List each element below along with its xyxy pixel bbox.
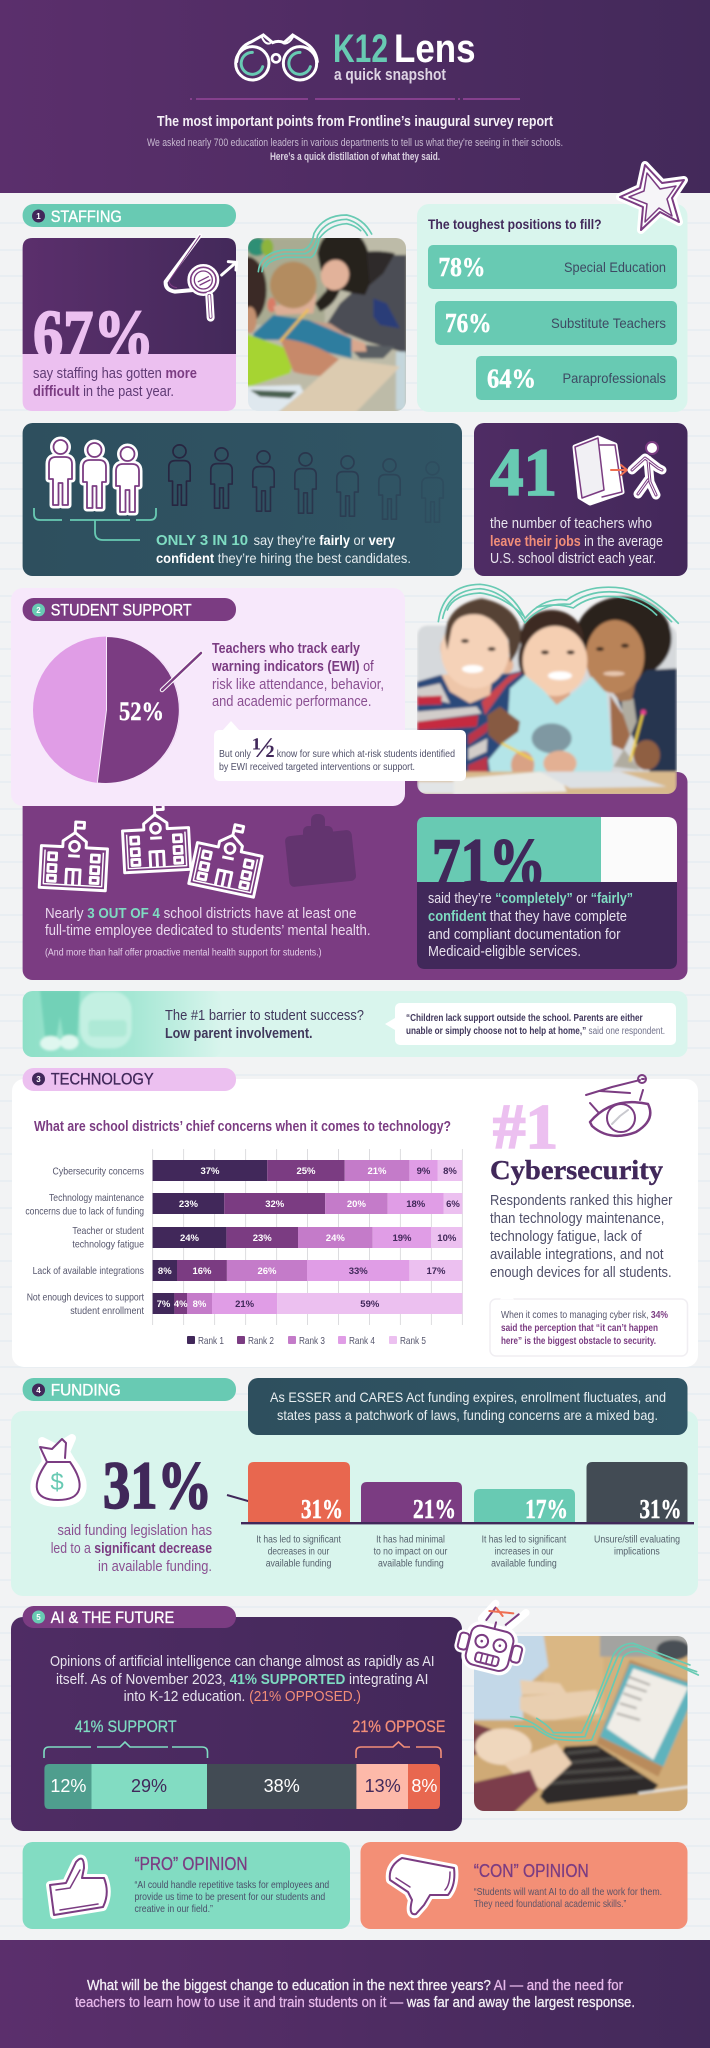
- row: not enough devices: 7%: [157, 1299, 171, 1310]
- closing statement: [75, 1977, 635, 2011]
- callout: half know for sure: [214, 721, 466, 781]
- stacked opinion bar: 12%: [50, 1776, 86, 1796]
- row: not enough devices: 4%: [174, 1299, 188, 1310]
- caption: ONLY 3 IN 10: [156, 532, 248, 549]
- quote: [134, 1879, 329, 1915]
- decorative teal trail over laptop: [511, 1643, 698, 1741]
- cybersecurity text: enough devices for all students.: [490, 1264, 672, 1281]
- row: technology fatigue: 19%: [392, 1233, 412, 1244]
- caption: said funding legislation has: [58, 1523, 212, 1539]
- caption: say they’re fairly or very: [254, 532, 395, 548]
- chart legend: Rank 4: [349, 1335, 375, 1347]
- pie caption: and academic performance.: [212, 694, 371, 710]
- quote: They need foundational academic skills.”: [474, 1898, 627, 1910]
- oppose label and bracket: 21% OPPOSE: [352, 1717, 445, 1736]
- section heading: staffing: [23, 204, 236, 227]
- panel: 67 percent staffing: [23, 236, 237, 411]
- row: not enough devices: 21%: [235, 1299, 255, 1310]
- caption: say staffing has gotten more: [33, 365, 197, 382]
- panel: only 3 in 10 confident: [23, 423, 462, 576]
- card: 71 percent: said they’re “completely” or “fairly”: [428, 891, 633, 907]
- bar captions: It has had minimal: [376, 1534, 445, 1546]
- card: 71 percent: [417, 817, 677, 969]
- row: cybersecurity: 8%: [443, 1166, 457, 1177]
- barrier text: [165, 1008, 364, 1042]
- funding intro box: As ESSER and CARES Act funding expires, enrollment fluctuates, and: [270, 1389, 666, 1405]
- barrier text: Low parent involvement.: [165, 1026, 312, 1042]
- icon: magnifying glass: [166, 236, 237, 318]
- quote callout: unable or simply choose not to help at home,” said one respondent.: [406, 1026, 665, 1037]
- caption: [45, 905, 370, 958]
- row labels: [25, 1166, 144, 1317]
- logo wordmark: K12: [333, 27, 388, 71]
- stacked bar chart: [25, 1149, 462, 1347]
- section heading: AI and the future: [23, 1606, 236, 1628]
- bar: unsure: [586, 1462, 688, 1524]
- icon: thumbs up: [50, 1859, 107, 1915]
- support label and bracket: [44, 1717, 208, 1758]
- heading: “CON” OPINION: [474, 1861, 589, 1881]
- section heading: student support: STUDENT SUPPORT: [51, 602, 192, 620]
- callout: cyber risk: [490, 1289, 688, 1356]
- callout: cyber risk: When it comes to managing cyber risk, 34%: [501, 1309, 669, 1321]
- icon: three highlighted people: [49, 440, 139, 512]
- bar: substitute teachers: Substitute Teachers: [551, 315, 666, 331]
- panel: funding: [11, 1378, 698, 1596]
- bar: paraprofessionals: Paraprofessionals: [562, 370, 666, 386]
- bar captions: [256, 1534, 680, 1570]
- row: technology maintenance: 18%: [406, 1199, 426, 1210]
- row: cybersecurity: [153, 1160, 462, 1181]
- pointer line: [162, 653, 201, 690]
- bar: substitute teachers: 76%: [445, 308, 491, 338]
- caption: [490, 516, 663, 567]
- bar: unsure: 31%: [640, 1494, 682, 1524]
- bar: substitute teachers: [435, 301, 677, 345]
- cybersecurity text: technology fatigue, lack of: [490, 1228, 642, 1245]
- row labels: technology fatigue: [72, 1238, 144, 1250]
- decorative teal trail: [258, 215, 372, 272]
- panel: student support: [11, 588, 405, 806]
- row labels: Cybersecurity concerns: [52, 1166, 144, 1178]
- row: technology fatigue: 24%: [326, 1233, 345, 1244]
- icon: seven muted people: [169, 445, 443, 522]
- cybersecurity text: available integrations, and not: [490, 1246, 664, 1263]
- pointer line: [227, 1495, 255, 1503]
- AI intro text: [50, 1653, 434, 1705]
- heading: “PRO” OPINION: [134, 1854, 248, 1874]
- bar captions: implications: [614, 1546, 660, 1558]
- row: technology fatigue: 24%: [180, 1233, 200, 1244]
- icon: eye and circuit: [586, 1075, 654, 1138]
- section heading: technology: 3: [36, 1075, 41, 1084]
- AI intro text: Opinions of artificial intelligence can change almost as rapidly as AI: [50, 1653, 434, 1670]
- header band: Lens: [394, 27, 476, 71]
- footer band: [0, 1940, 710, 2048]
- panel: number one barrier: [23, 990, 688, 1057]
- photo: three smiling children: [417, 597, 677, 796]
- intro text: [147, 137, 563, 163]
- stacked opinion bar: 8%: [411, 1776, 437, 1796]
- caption: led to a significant decrease: [51, 1541, 212, 1557]
- icon: clipboard silhouette: [285, 814, 357, 887]
- row: available integrations: 8%: [158, 1266, 172, 1277]
- cybersecurity text: than technology maintenance,: [490, 1210, 664, 1227]
- row: technology maintenance: 23%: [179, 1199, 198, 1210]
- callout: half know for sure: by EWI received targeted interventions or support.: [219, 761, 415, 773]
- funding intro box: [248, 1378, 688, 1435]
- panel title: The toughest positions to fill?: [428, 216, 602, 232]
- big number 31%: 31%: [103, 1447, 212, 1523]
- quote callout: “Children lack support outside the school. Parents are either: [406, 1013, 643, 1024]
- callout: half know for sure: know for sure which at-risk students identified: [277, 748, 455, 760]
- cybersecurity heading: Cybersecurity: [490, 1155, 664, 1185]
- bracket: [34, 508, 156, 540]
- quote: provide us time to be present for our students and: [134, 1891, 325, 1903]
- row: technology maintenance: [153, 1193, 462, 1214]
- big number 41: 41: [490, 434, 557, 510]
- bar: increases: [474, 1489, 575, 1524]
- icon: robot: [454, 1597, 532, 1675]
- row: cybersecurity: 9%: [417, 1166, 431, 1177]
- row: available integrations: 17%: [426, 1266, 446, 1277]
- bar captions: available funding: [266, 1558, 331, 1570]
- row: technology maintenance: 32%: [265, 1199, 285, 1210]
- row: available integrations: 26%: [257, 1266, 277, 1277]
- bar: decreases: [248, 1462, 350, 1524]
- row labels: concerns due to lack of funding: [25, 1206, 144, 1218]
- icon: thumbs down: [390, 1858, 454, 1914]
- card: pro opinion: [23, 1842, 350, 1929]
- stacked opinion bar: 13%: [365, 1776, 401, 1796]
- caption: confident they’re hiring the best candidates.: [156, 550, 411, 566]
- callout: half know for sure: But only: [219, 748, 252, 760]
- caption: in available funding.: [98, 1559, 212, 1575]
- pie caption: risk like attendance, behavior,: [212, 677, 384, 693]
- bar captions: to no impact on our: [374, 1546, 448, 1558]
- caption: [51, 1523, 212, 1575]
- caption: the number of teachers who: [490, 516, 652, 532]
- row: available integrations: [153, 1260, 462, 1281]
- row labels: Teacher or student: [72, 1225, 144, 1237]
- caption: U.S. school district each year.: [490, 551, 656, 567]
- callout: half know for sure: ½: [252, 733, 275, 764]
- bar: increases: 17%: [525, 1494, 568, 1524]
- card: con opinion: [360, 1842, 688, 1929]
- decorative teal trail over children: [438, 584, 678, 623]
- bar captions: available funding: [378, 1558, 444, 1570]
- section heading: AI and the future: 5: [36, 1613, 41, 1622]
- cybersecurity text: [490, 1192, 672, 1281]
- section heading: AI and the future: AI & THE FUTURE: [51, 1609, 174, 1627]
- row: cybersecurity: 25%: [296, 1166, 316, 1177]
- pie caption: Teachers who track early: [212, 641, 360, 657]
- chart legend: Rank 5: [400, 1335, 426, 1347]
- section heading: technology: TECHNOLOGY: [51, 1070, 154, 1088]
- row: not enough devices: 59%: [360, 1299, 380, 1310]
- callout: cyber risk: said the perception that “it can’t happen: [501, 1322, 658, 1334]
- pie caption: [211, 641, 384, 710]
- photo: legs and backpack: [23, 990, 223, 1057]
- card: 71 percent: Medicaid-eligible services.: [428, 944, 581, 960]
- bar captions: It has led to significant: [482, 1534, 566, 1546]
- card: 71 percent: 71%: [432, 824, 546, 900]
- caption: difficult in the past year.: [33, 383, 174, 400]
- quote callout: [385, 1003, 676, 1045]
- bar: minimal: [361, 1482, 462, 1524]
- quote: [474, 1886, 662, 1910]
- card: 71 percent: confident that they have complete: [428, 909, 627, 925]
- AI intro text: itself. As of November 2023, 41% SUPPORTED integrating AI: [56, 1671, 428, 1688]
- closing statement: What will be the biggest change to education in the next three years? AI — and the need for: [87, 1977, 623, 1994]
- pie chart: 52 percent: 52%: [119, 697, 164, 726]
- card: 71 percent: and compliant documentation for: [428, 927, 621, 943]
- row: technology fatigue: [153, 1227, 462, 1248]
- bar captions: Unsure/still evaluating: [594, 1534, 680, 1546]
- section heading: funding: [23, 1378, 236, 1401]
- bar chart: funding impact: [241, 1462, 694, 1570]
- section heading: student support: [23, 598, 236, 621]
- AI intro text: into K-12 education. (21% OPPOSED.): [124, 1688, 361, 1705]
- header band: [0, 0, 710, 193]
- row labels: Lack of available integrations: [33, 1265, 144, 1277]
- funding intro box: states pass a patchwork of laws, funding concerns are a mixed bag.: [277, 1407, 658, 1423]
- row labels: Technology maintenance: [49, 1192, 144, 1204]
- bar captions: increases in our: [494, 1546, 554, 1558]
- caption: full-time employee dedicated to students’ mental health.: [45, 922, 370, 939]
- bar: decreases: 31%: [301, 1494, 343, 1524]
- logo: binoculars icon: [236, 35, 317, 80]
- oppose label and bracket: [352, 1717, 445, 1758]
- bar captions: decreases in our: [268, 1546, 330, 1558]
- bar: special education: Special Education: [564, 259, 666, 275]
- bar captions: available funding: [491, 1558, 557, 1570]
- row: cybersecurity: 21%: [367, 1166, 387, 1177]
- row: available integrations: 33%: [349, 1266, 368, 1277]
- callout: cyber risk: here” is the biggest obstacle to security.: [501, 1335, 656, 1347]
- cybersecurity text: Respondents ranked this higher: [490, 1192, 672, 1209]
- section heading: funding: FUNDING: [51, 1382, 121, 1400]
- chart legend: [187, 1335, 426, 1347]
- panel: toughest positions: [417, 204, 688, 412]
- section heading: staffing: 1: [36, 212, 41, 221]
- support label and bracket: 41% SUPPORT: [75, 1717, 177, 1736]
- chart legend: Rank 1: [198, 1335, 224, 1347]
- panel: technology: [12, 1068, 698, 1367]
- quote: “Students will want AI to do all the work for them.: [474, 1886, 662, 1898]
- icon: schools: [39, 802, 267, 897]
- icon: star: [620, 165, 684, 230]
- row: technology maintenance: 20%: [347, 1199, 366, 1210]
- panel: 41 teachers leave: [474, 423, 688, 576]
- icon: person leaving door: [575, 438, 662, 503]
- bar captions: It has led to significant: [256, 1534, 341, 1546]
- big number 67%: 67%: [33, 297, 154, 374]
- panel: mental health and medicaid: [23, 772, 688, 980]
- section heading: funding: 4: [36, 1386, 41, 1395]
- chart legend: Rank 2: [248, 1335, 274, 1347]
- row: technology fatigue: 23%: [253, 1233, 272, 1244]
- quote: “AI could handle repetitive tasks for employees and: [134, 1879, 329, 1891]
- row labels: student enrollment: [70, 1305, 144, 1317]
- row: technology maintenance: 6%: [446, 1199, 460, 1210]
- row: not enough devices: 8%: [193, 1299, 207, 1310]
- intro text: Here’s a quick distillation of what they said.: [270, 151, 440, 163]
- bar: paraprofessionals: [476, 356, 677, 400]
- row: available integrations: 16%: [192, 1266, 212, 1277]
- icon: money bag: $: [50, 1469, 64, 1496]
- row: technology fatigue: 10%: [437, 1233, 457, 1244]
- panel: AI and the future: [11, 1606, 462, 1831]
- photo: teacher and students: [248, 214, 406, 411]
- heading: The most important points from Frontline’s inaugural survey report: [157, 113, 553, 130]
- pie caption: warning indicators (EWI) of: [211, 659, 374, 675]
- big label #1: #1: [493, 1091, 558, 1162]
- quote: creative in our field.”: [134, 1903, 213, 1915]
- chart legend: Rank 3: [299, 1335, 325, 1347]
- section heading: technology: [23, 1068, 236, 1091]
- barrier text: The #1 barrier to student success?: [165, 1008, 364, 1024]
- intro text: We asked nearly 700 education leaders in various departments to tell us what they’re seeing in their schools.: [147, 137, 563, 149]
- caption: [33, 365, 197, 400]
- caption: leave their jobs in the average: [490, 534, 663, 550]
- section heading: staffing: STAFFING: [51, 208, 122, 226]
- row: not enough devices: [153, 1293, 462, 1314]
- bar: special education: [428, 245, 677, 289]
- caption: (And more than half offer proactive mental health support for students.): [45, 946, 322, 958]
- caption: Nearly 3 OUT OF 4 school districts have at least one: [45, 905, 356, 922]
- stacked opinion bar: [44, 1764, 440, 1809]
- closing statement: teachers to learn how to use it and train students on it — was far and away the largest response.: [75, 1994, 635, 2011]
- bar: minimal: 21%: [413, 1494, 456, 1524]
- stacked opinion bar: 29%: [131, 1776, 167, 1796]
- chart title: What are school districts’ chief concerns when it comes to technology?: [34, 1119, 451, 1135]
- icon: money bag: [34, 1438, 83, 1503]
- row labels: Not enough devices to support: [27, 1292, 144, 1304]
- section heading: student support: 2: [36, 606, 41, 615]
- tagline: a quick snapshot: [334, 65, 446, 84]
- photo: hands on laptop: [470, 1633, 698, 1813]
- row: cybersecurity: 37%: [200, 1166, 220, 1177]
- bar: special education: 78%: [438, 252, 485, 282]
- stacked opinion bar: 38%: [264, 1776, 300, 1796]
- bar: paraprofessionals: 64%: [487, 364, 536, 394]
- caption: [156, 532, 411, 566]
- pie chart: 52 percent: [33, 636, 180, 784]
